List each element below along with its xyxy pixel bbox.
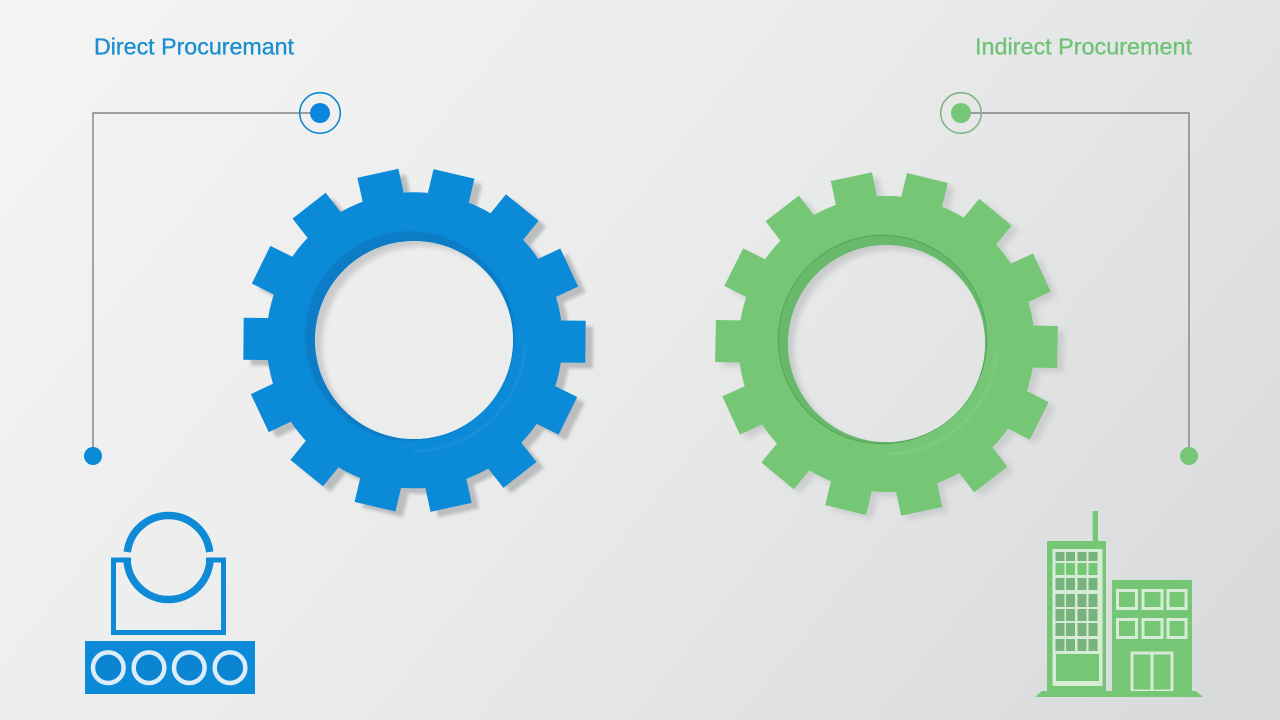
connector: indirect procurement — [941, 93, 1198, 465]
gear: indirect procurement — [713, 170, 1067, 523]
antenna — [1093, 511, 1098, 542]
connector: direct procurement — [84, 93, 340, 465]
machine housing — [114, 560, 224, 632]
gear: direct procurement — [242, 167, 594, 519]
conveyor belt — [85, 641, 255, 694]
icon: factory machine on conveyor — [85, 515, 255, 694]
icon: direct end dot — [84, 447, 102, 465]
ground base — [1035, 691, 1203, 697]
low building — [1112, 580, 1192, 692]
heading: indirect procurement: Indirect Procurement — [975, 34, 1192, 60]
icon: indirect end dot — [1180, 447, 1198, 465]
upper arc — [127, 515, 210, 552]
heading: direct procurement: Direct Procuremant — [94, 34, 294, 60]
tall tower — [1047, 541, 1106, 693]
lower arc — [127, 558, 210, 600]
icon: office buildings — [1035, 511, 1203, 697]
icon: indirect target marker — [941, 93, 981, 133]
icon: direct target marker — [300, 93, 340, 133]
